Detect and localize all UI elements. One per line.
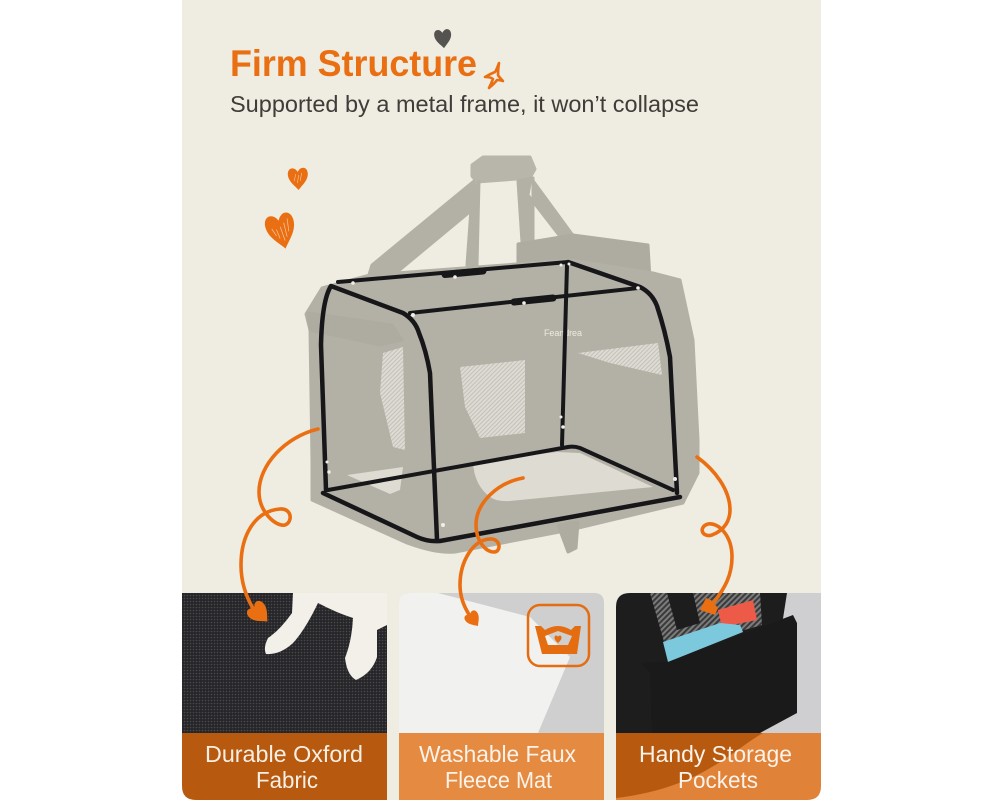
arrow line	[241, 429, 318, 610]
caption band	[182, 733, 387, 800]
caption swoosh	[616, 733, 763, 798]
small heart	[554, 636, 562, 643]
icon: large orange heart	[263, 211, 300, 252]
fabric photo	[182, 593, 387, 733]
card: washable fleece mat	[399, 593, 604, 800]
caption: Washable Faux	[419, 741, 576, 767]
left end arch	[321, 286, 437, 540]
fleece mat	[399, 593, 570, 733]
background panel	[182, 0, 821, 800]
infographic: firm structure	[182, 0, 821, 800]
metal frame	[321, 262, 680, 541]
back top bar	[338, 262, 568, 282]
pocket	[668, 615, 797, 733]
caption: Handy Storage	[639, 741, 792, 767]
carrier silhouette	[306, 157, 698, 552]
brand mark: Feandrea	[544, 328, 582, 338]
icon border	[528, 605, 589, 666]
carry handle	[472, 157, 535, 182]
blue package	[663, 623, 743, 662]
dark centre strip	[667, 593, 700, 630]
caption band	[616, 733, 821, 800]
icon: washable symbol	[528, 605, 589, 666]
icon: dark heart	[434, 29, 453, 49]
wash tub	[535, 626, 581, 654]
grey backdrop	[438, 593, 604, 733]
caption second line: Fleece Mat	[445, 767, 553, 793]
subtitle: Supported by a metal frame, it won’t collapse	[230, 91, 699, 117]
back pocket	[518, 235, 650, 280]
carrier windows and mat	[347, 328, 662, 501]
card: durable oxford fabric	[182, 593, 387, 800]
right mesh window	[578, 343, 662, 375]
black bag	[616, 593, 787, 733]
floor mat	[473, 452, 653, 501]
left mesh window	[380, 347, 405, 450]
top bar connectors	[445, 271, 553, 302]
arrow line	[460, 478, 523, 616]
bottom wheel	[558, 522, 578, 552]
caption: Durable Oxford	[205, 741, 363, 767]
arrow heart	[463, 609, 484, 630]
arrow heart	[245, 599, 275, 629]
arrow: to fleece mat	[460, 478, 523, 630]
card: handy storage pockets	[616, 593, 821, 800]
title: Firm Structure	[230, 43, 477, 84]
frame rivets	[326, 262, 677, 527]
back post and back base	[328, 265, 673, 490]
caption second line: Fabric	[256, 767, 318, 793]
red card	[718, 600, 757, 627]
base rail	[323, 493, 680, 541]
carry straps	[368, 178, 580, 278]
icon: small orange heart	[287, 168, 309, 191]
grey backdrop	[760, 593, 821, 733]
icon: sparkle	[485, 63, 503, 88]
caption second line: Pockets	[678, 767, 758, 793]
right end arch	[568, 262, 677, 493]
left floor mat edge	[347, 467, 403, 494]
arrow: to pockets	[697, 457, 732, 615]
front top bar	[410, 288, 638, 313]
arrow heart	[700, 598, 718, 615]
left end flap	[308, 313, 402, 345]
arrow: to fabric	[241, 429, 318, 629]
arrow line	[697, 457, 732, 602]
centre mesh window	[460, 360, 525, 438]
caption band	[399, 733, 604, 800]
dog paws	[265, 593, 387, 680]
carrier body	[306, 260, 698, 552]
mesh lining	[650, 593, 762, 642]
